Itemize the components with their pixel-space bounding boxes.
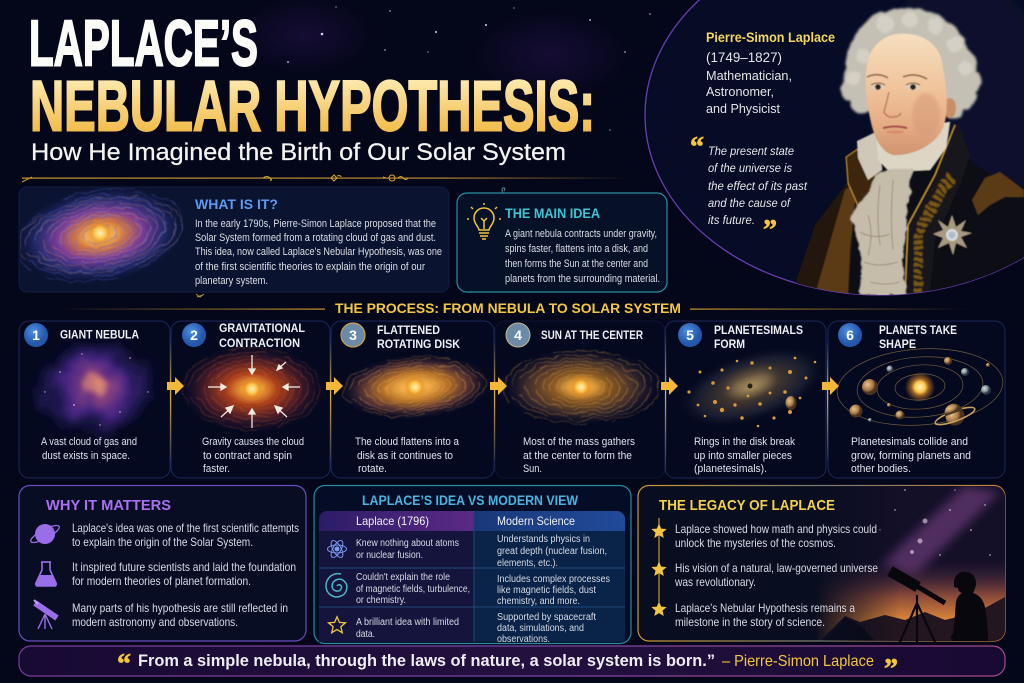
quote banner <box>19 646 1005 683</box>
step text: at the center to form the <box>523 450 632 462</box>
step title: FORM <box>714 339 745 351</box>
step text: The cloud flattens into a <box>355 436 460 448</box>
panel: why it matters <box>19 486 306 641</box>
ornamental divider <box>22 175 628 297</box>
icon: star outline <box>329 617 345 633</box>
row 3: A brilliant idea with limited <box>356 617 459 628</box>
mountains <box>820 597 1005 641</box>
row 2: or chemistry. <box>356 595 406 606</box>
icon: ringed planet <box>29 523 61 545</box>
step title: CONTRACTION <box>219 338 300 350</box>
step 3 card: flattened rotating disk <box>331 321 494 478</box>
heading: WHAT IS IT? <box>195 197 278 212</box>
step text: up into smaller pieces <box>694 450 792 462</box>
image: stargazer under the night sky <box>818 486 1005 641</box>
step title: SUN AT THE CENTER <box>541 330 644 342</box>
step title: GRAVITATIONAL <box>219 323 305 335</box>
step title: ROTATING DISK <box>377 339 461 351</box>
step text <box>694 436 795 475</box>
icon: atom <box>328 539 346 559</box>
icon: flask <box>35 562 56 586</box>
row 1: Knew nothing about atoms <box>356 538 459 549</box>
step text: Rings in the disk break <box>694 436 795 448</box>
row 3 <box>356 612 596 645</box>
heading: LAPLACE’S IDEA VS MODERN VIEW <box>362 493 578 508</box>
step title <box>219 323 305 350</box>
quote banner: From a simple nebula, through the laws of nature, a solar system is born.” <box>138 651 715 670</box>
number badge 1 <box>24 323 48 347</box>
body text: In the early 1790s, Pierre-Simon Laplace proposed that the <box>195 218 436 230</box>
step text: to contract and spin <box>203 450 292 462</box>
number badge 3 <box>341 323 365 347</box>
number badge 6: 6 <box>846 327 854 343</box>
row 2: of magnetic fields, turbulence, <box>356 584 470 595</box>
row 3: observations. <box>497 634 550 645</box>
title line: Nebular Hypothesis: NEBULAR HYPOTHESIS: <box>30 68 595 146</box>
portrait caption <box>706 30 835 116</box>
body text: This idea, now called Laplace's Nebular Hypothesis, was one <box>195 246 442 258</box>
person silhouette <box>951 572 988 641</box>
step text: faster. <box>203 463 230 475</box>
panel: comparison table <box>314 486 631 645</box>
image: galaxy <box>20 188 184 284</box>
title <box>29 6 595 166</box>
step title <box>879 325 957 351</box>
step text: disk as it continues to <box>357 450 453 462</box>
hair <box>841 8 981 120</box>
step text: grow, forming planets and <box>851 450 971 462</box>
central sun disk image <box>501 349 661 425</box>
row 1: or nuclear fusion. <box>356 550 423 561</box>
arrow: step 3 to 4 <box>490 377 507 395</box>
number badge 4: 4 <box>514 327 522 343</box>
portrait caption: Pierre-Simon Laplace <box>706 30 835 45</box>
legacy item 3: Laplace's Nebular Hypothesis remains a <box>675 601 855 615</box>
step title: SHAPE <box>879 339 916 351</box>
number badge 1: 1 <box>32 327 40 343</box>
row 2 <box>356 572 610 607</box>
body text <box>505 228 660 285</box>
body text: planetary system. <box>195 275 268 287</box>
shaded cheek <box>912 93 940 128</box>
reason 2: for modern theories of planet formation. <box>72 574 251 588</box>
heading: THE LEGACY OF LAPLACE <box>659 497 835 514</box>
row 2: chemistry, and more. <box>497 596 580 607</box>
step text: rotate. <box>358 463 387 475</box>
arrow: step 1 to 2 <box>167 377 184 395</box>
reason 1: Laplace's idea was one of the first scientific attempts <box>72 521 299 535</box>
portrait quote: ” <box>763 215 777 246</box>
step text: Most of the mass gathers <box>523 436 635 448</box>
flattened disk image <box>337 350 493 424</box>
arrow: step 4 to 5 <box>661 377 678 395</box>
row 1: Understands physics in <box>497 534 590 545</box>
number badge 2 <box>182 323 206 347</box>
lace jabot <box>850 168 912 295</box>
step text: other bodies. <box>851 463 911 475</box>
step text <box>355 436 460 475</box>
number badge 5 <box>678 323 702 347</box>
step 4 card: sun at the center <box>495 321 665 478</box>
portrait quote: the effect of its past <box>708 179 808 193</box>
reason 2: It inspired future scientists and laid the foundation <box>72 560 296 574</box>
legacy item 1: Laplace showed how math and physics could <box>675 522 877 536</box>
row 3: data. <box>356 629 375 640</box>
row 2: Includes complex processes <box>497 574 610 585</box>
body text: Solar System formed from a rotating cloud of gas and dust. <box>195 232 436 244</box>
row 2: like magnetic fields, dust <box>497 585 596 596</box>
reason 3 <box>72 601 288 629</box>
section heading: the process: THE PROCESS: FROM NEBULA TO SOLAR SYSTEM <box>335 301 681 316</box>
row 1: great depth (nuclear fusion, <box>497 546 607 557</box>
legacy item 3 <box>675 601 855 629</box>
legacy item 3: milestone in the story of science. <box>675 615 825 629</box>
icon: light bulb <box>467 203 501 239</box>
portrait quote: “ <box>690 132 704 163</box>
reason 3: modern astronomy and observations. <box>72 615 238 629</box>
step text: (planetesimals). <box>694 463 767 475</box>
step title: PLANETESIMALS <box>714 325 803 337</box>
saturn <box>931 397 978 432</box>
legacy item 2: was revolutionary. <box>674 575 756 589</box>
table <box>319 511 625 645</box>
portrait caption: Astronomer, <box>706 85 774 99</box>
reason 1: to explain the origin of the Solar System. <box>72 535 253 549</box>
body text: planets from the surrounding material. <box>505 273 660 285</box>
step text <box>202 436 304 475</box>
portrait caption: Mathematician, <box>706 69 792 83</box>
panel: what is it <box>18 186 450 292</box>
step text <box>41 436 137 462</box>
medal star <box>933 215 972 255</box>
quote banner: “ <box>117 649 131 680</box>
portrait caption: and Physicist <box>706 102 781 116</box>
step title: FLATTENED <box>377 325 440 337</box>
gold accent lines between cards <box>170 330 828 470</box>
legacy item 1: unlock the mysteries of the cosmos. <box>675 536 836 550</box>
reason 3: Many parts of his hypothesis are still reflected in <box>72 601 288 615</box>
title line: Laplace's: LAPLACE’S <box>29 6 258 80</box>
number badge 6 <box>838 323 862 347</box>
body text: of the first scientific theories to explain the origin of our <box>195 261 425 273</box>
body text: A giant nebula contracts under gravity, <box>505 228 657 240</box>
reason 2 <box>72 560 296 588</box>
portrait quote <box>690 132 808 246</box>
row 2: Couldn't explain the role <box>356 572 450 583</box>
body text: then forms the Sun at the center and <box>505 258 648 270</box>
step 6 card: planets take shape <box>828 321 1005 478</box>
body text: spins faster, flattens into a disk, and <box>505 243 648 255</box>
step text: Gravity causes the cloud <box>202 436 304 448</box>
number badge 5: 5 <box>686 327 694 343</box>
step text: dust exists in space. <box>42 450 130 462</box>
telescope silhouette <box>890 571 945 642</box>
step title: GIANT NEBULA <box>60 330 139 342</box>
legacy item 1 <box>675 522 877 550</box>
nebula image <box>27 333 163 441</box>
planetesimals image <box>669 331 835 443</box>
timeline stars <box>651 518 667 616</box>
step title <box>714 325 803 351</box>
reason 1 <box>72 521 299 549</box>
step 2 card: gravitational contraction <box>171 321 330 478</box>
solar system image <box>835 343 1005 432</box>
step 5 card: planetesimals form <box>665 321 835 478</box>
panel: the main idea <box>457 193 667 292</box>
portrait quote: of the universe is <box>708 161 792 175</box>
arrow: step 5 to 6 <box>822 377 839 395</box>
face <box>866 34 947 155</box>
column headers: Laplace (1796) <box>356 514 429 528</box>
portrait quote: The present state <box>708 144 794 158</box>
step text <box>851 436 971 475</box>
number badge 3: 3 <box>349 327 357 343</box>
collar <box>857 130 882 180</box>
step title <box>377 325 461 351</box>
portrait caption: (1749–1827) <box>706 50 782 65</box>
step 1 card: giant nebula <box>19 321 170 478</box>
number badge 2: 2 <box>190 327 198 343</box>
panel: portrait of Laplace <box>645 0 1024 300</box>
step text <box>523 436 635 475</box>
step text: Sun. <box>523 463 542 475</box>
arrow: step 2 to 3 <box>326 377 343 395</box>
icon: spiral <box>326 574 347 597</box>
legacy item 2 <box>674 561 878 589</box>
step title: PLANETS TAKE <box>879 325 957 337</box>
quote banner: – Pierre-Simon Laplace <box>722 653 874 670</box>
row 3: data, simulations, and <box>497 623 584 634</box>
row 1: elements, etc.). <box>497 558 558 569</box>
heading: THE MAIN IDEA <box>505 206 600 221</box>
legacy item 2: His vision of a natural, law-governed universe <box>675 561 878 575</box>
step text: Planetesimals collide and <box>851 436 968 448</box>
icon: telescope <box>34 600 57 629</box>
neck and stock <box>876 122 950 172</box>
step text: A vast cloud of gas and <box>41 436 137 448</box>
portrait quote: and the cause of <box>708 196 792 210</box>
collapsing cloud image with inward arrows <box>180 345 324 433</box>
eyes and brows <box>867 75 927 90</box>
panel: the legacy of Laplace <box>638 486 1005 642</box>
heading: WHY IT MATTERS <box>46 497 171 514</box>
number badge 4 <box>506 323 530 347</box>
table: Modern Science <box>497 514 575 528</box>
body text <box>195 218 442 287</box>
subtitle: How He Imagined the Birth of Our Solar System <box>31 139 566 166</box>
row 1 <box>356 534 607 569</box>
portrait quote: its future. <box>708 213 755 227</box>
ear <box>944 98 956 118</box>
nose and mouth <box>884 92 901 117</box>
coat <box>848 134 1024 295</box>
row 3: Supported by spacecraft <box>497 612 596 623</box>
portrait illustration <box>790 0 1024 300</box>
